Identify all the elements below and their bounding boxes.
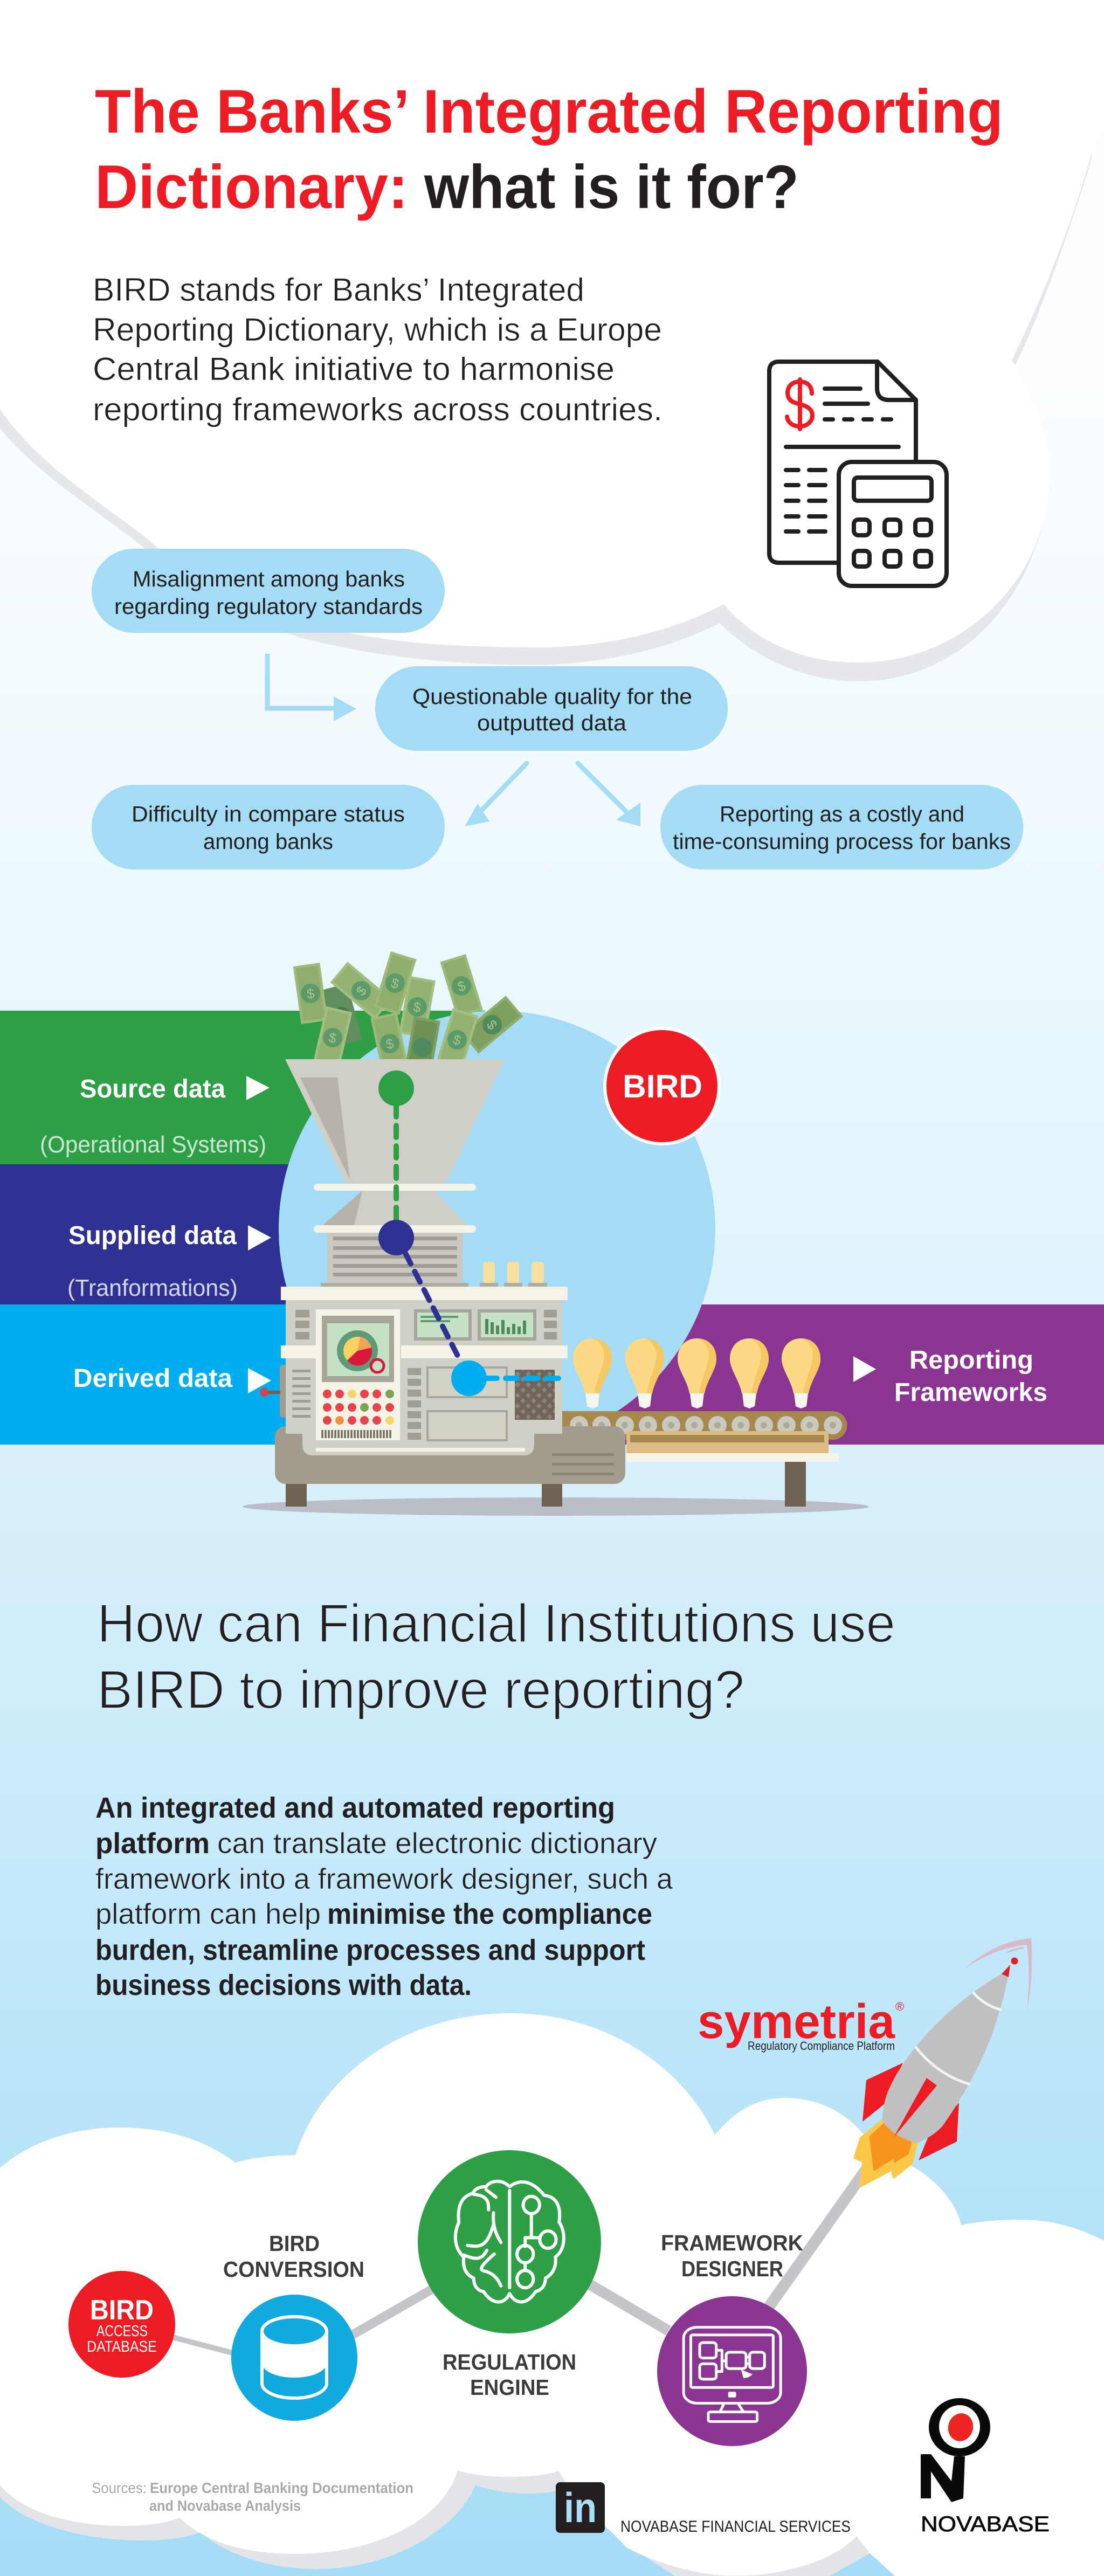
money bills: $ [306, 986, 315, 1002]
machine: control panel [316, 1309, 400, 1440]
machine: yellow knobs [480, 1262, 547, 1287]
label: framework designer [661, 2230, 803, 2281]
node: BIRD access database: ACCESS [96, 2323, 148, 2340]
band: derived data: Derived data [73, 1364, 232, 1393]
sources note [92, 2480, 413, 2514]
light bulbs [573, 1338, 820, 1408]
section paragraph: burden, streamline processes and support [95, 1934, 645, 1966]
machine: hopper [285, 1059, 505, 1287]
symetria logo: Regulatory Compliance Platform [748, 2039, 895, 2053]
pill: quality: outputted data [477, 710, 626, 735]
money bills: $ [354, 983, 370, 999]
title: what is it for? [424, 153, 799, 222]
badge: BIRD [603, 1027, 721, 1145]
pill: quality [375, 666, 728, 751]
symetria logo: symetria [698, 1995, 895, 2049]
money bills: $ [484, 1017, 500, 1033]
label: BIRD conversion [223, 2231, 364, 2282]
label: Novabase Financial Services: NOVABASE FINANCIAL SERVICES [620, 2518, 851, 2536]
top cloud [0, 0, 1104, 681]
Novabase logo: NOVABASE [921, 2512, 1050, 2536]
sources note: Sources: [92, 2480, 147, 2496]
conveyor with legs [562, 1411, 847, 1507]
pill: misalignment: Misalignment among banks [133, 567, 405, 591]
section paragraph: platform can help [95, 1898, 321, 1930]
title: Dictionary: [95, 153, 408, 222]
pill: misalignment: regarding regulatory standards [114, 594, 423, 619]
ground shadow [243, 1497, 869, 1516]
label: regulation engine: REGULATION [443, 2350, 576, 2374]
intro text block: Central Bank initiative to harmonise [93, 351, 615, 387]
Novabase logo [921, 2398, 1050, 2536]
node: BIRD conversion [231, 2295, 357, 2421]
intro text block: reporting frameworks across countries. [93, 391, 663, 427]
label: framework designer: DESIGNER [681, 2256, 783, 2281]
band: supplied data: (Tranformations) [67, 1275, 238, 1301]
section paragraph: can translate electronic dictionary [217, 1827, 657, 1860]
money bills: $ [412, 999, 422, 1016]
node: regulation engine with brain icon [418, 2150, 601, 2333]
section heading [97, 1593, 895, 1720]
band: reporting frameworks [593, 1304, 1104, 1445]
band: reporting frameworks: Frameworks [894, 1378, 1047, 1407]
band: supplied data [0, 1164, 377, 1304]
label: BIRD conversion: CONVERSION [223, 2257, 364, 2282]
BIRD backdrop circle [279, 1011, 715, 1447]
label: regulation engine [443, 2350, 576, 2400]
section heading: How can Financial Institutions use [97, 1593, 895, 1654]
node: BIRD access database: DATABASE [87, 2338, 157, 2356]
money bills: $ [456, 978, 467, 995]
section paragraph: An integrated and automated reporting [95, 1792, 615, 1824]
band: supplied data: Supplied data [68, 1221, 237, 1250]
node: BIRD access database [68, 2271, 175, 2378]
intro text block [93, 272, 663, 427]
money bills: $ [384, 1036, 395, 1052]
bottom cloud [0, 2013, 1104, 2576]
connector lines [172, 2167, 868, 2353]
pill: costly: time-consuming process for banks [673, 829, 1011, 854]
icon: LinkedIn: in [564, 2484, 597, 2531]
node: framework designer with monitor icon [657, 2296, 807, 2446]
section paragraph: framework into a framework designer, such a [95, 1863, 673, 1895]
pill: quality: Questionable quality for the [412, 684, 692, 709]
band: derived data [0, 1304, 377, 1445]
data flow line: supplied to derived [378, 1220, 461, 1362]
pill: difficulty: among banks [203, 829, 333, 854]
money bills: $ [327, 1030, 338, 1046]
section paragraph: minimise the compliance [327, 1898, 652, 1930]
intro text block: Reporting Dictionary, which is a Europe [93, 312, 662, 348]
pill: costly: Reporting as a costly and [720, 802, 964, 826]
pill: misalignment [92, 549, 445, 633]
symetria logo: ® [895, 2000, 904, 2013]
data flow line: source to supplied [378, 1071, 414, 1221]
arrow: misalignment to quality [267, 654, 356, 721]
node: BIRD access database: BIRD [90, 2295, 154, 2326]
section paragraph: platform [95, 1827, 210, 1860]
label: regulation engine: ENGINE [470, 2375, 549, 2400]
data flow line: derived to bulbs [451, 1360, 562, 1396]
arrow: quality to difficulty [465, 763, 527, 826]
pill: difficulty [92, 785, 445, 869]
label: BIRD conversion: BIRD [269, 2231, 320, 2256]
money bills: $ [389, 976, 401, 992]
title [95, 78, 1003, 222]
pill: costly [660, 785, 1023, 869]
section heading: BIRD to improve reporting? [97, 1660, 744, 1720]
sources note: and Novabase Analysis [149, 2497, 301, 2514]
money bills [293, 951, 523, 1079]
money bills: $ [451, 1032, 463, 1048]
band: source data: (Operational Systems) [40, 1131, 266, 1158]
machine: body [281, 1287, 568, 1455]
machine: base [275, 1426, 625, 1507]
band: source data [0, 1011, 485, 1164]
title: The Banks’ Integrated Reporting [95, 78, 1003, 146]
rocket [855, 1938, 1032, 2186]
machine: lever [260, 1365, 287, 1418]
section paragraph: business decisions with data. [95, 1969, 472, 2001]
pill: difficulty: Difficulty in compare status [132, 802, 405, 826]
band: source data: Source data [80, 1075, 225, 1103]
band: reporting frameworks: Reporting [909, 1346, 1033, 1375]
sources note: Europe Central Banking Documentation [150, 2480, 413, 2496]
badge: BIRD: BIRD [623, 1068, 702, 1104]
intro text block: BIRD stands for Banks’ Integrated [93, 272, 584, 308]
arrow: quality to costly [578, 763, 640, 826]
section paragraph [95, 1792, 673, 2001]
icon: invoice and calculator [769, 362, 947, 586]
label: framework designer: FRAMEWORK [661, 2230, 803, 2255]
